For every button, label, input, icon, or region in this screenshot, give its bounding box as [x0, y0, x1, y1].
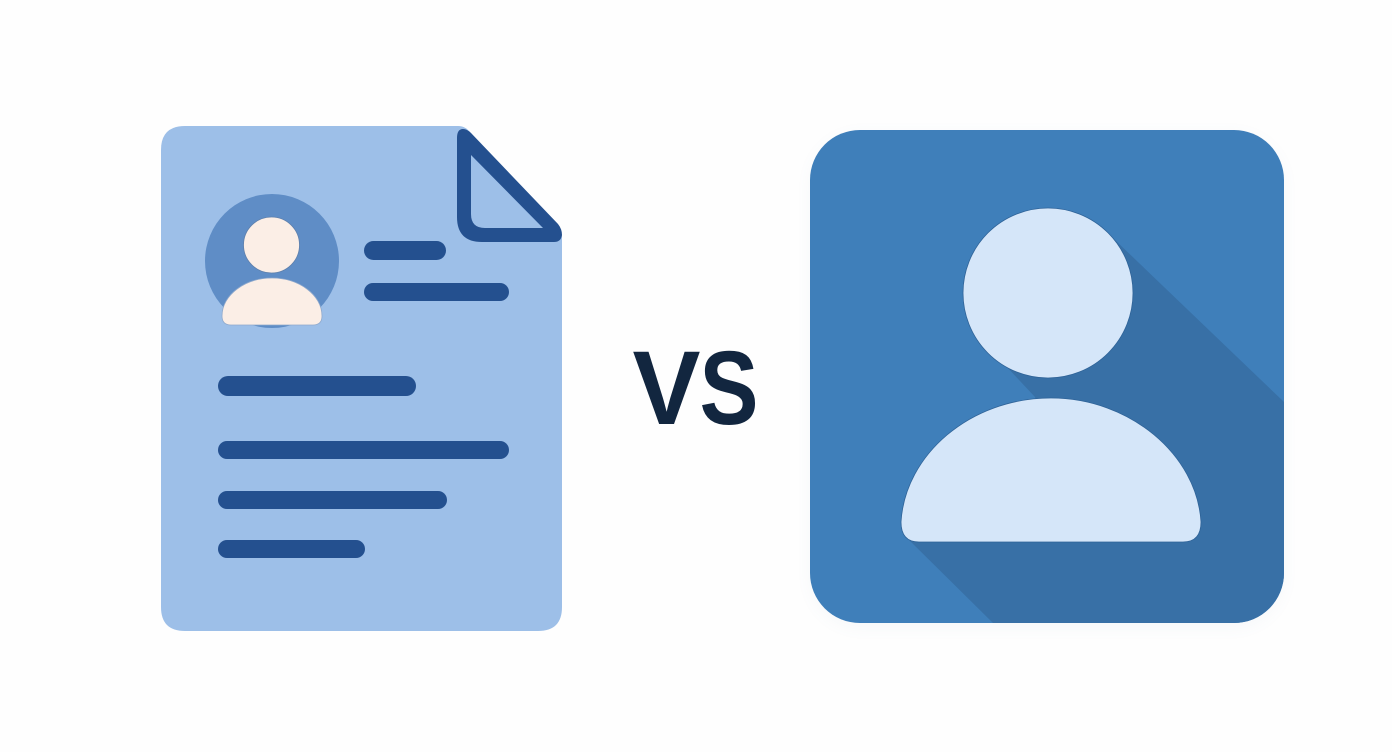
infographic: resume vs profile	[161, 126, 1284, 631]
avatar head	[963, 208, 1133, 378]
folded corner	[457, 129, 562, 242]
icon: profile avatar	[810, 130, 1284, 623]
vs label: S	[700, 330, 758, 447]
long shadow	[905, 240, 1284, 623]
document page	[161, 126, 562, 631]
vs label: V	[632, 330, 700, 447]
profile photo	[205, 194, 339, 328]
avatar background	[810, 130, 1284, 623]
body text lines	[218, 376, 509, 558]
header text lines	[364, 241, 509, 301]
soft shadow behind avatar	[812, 136, 1282, 626]
avatar shoulders	[901, 398, 1201, 542]
icon: resume document	[161, 126, 562, 631]
